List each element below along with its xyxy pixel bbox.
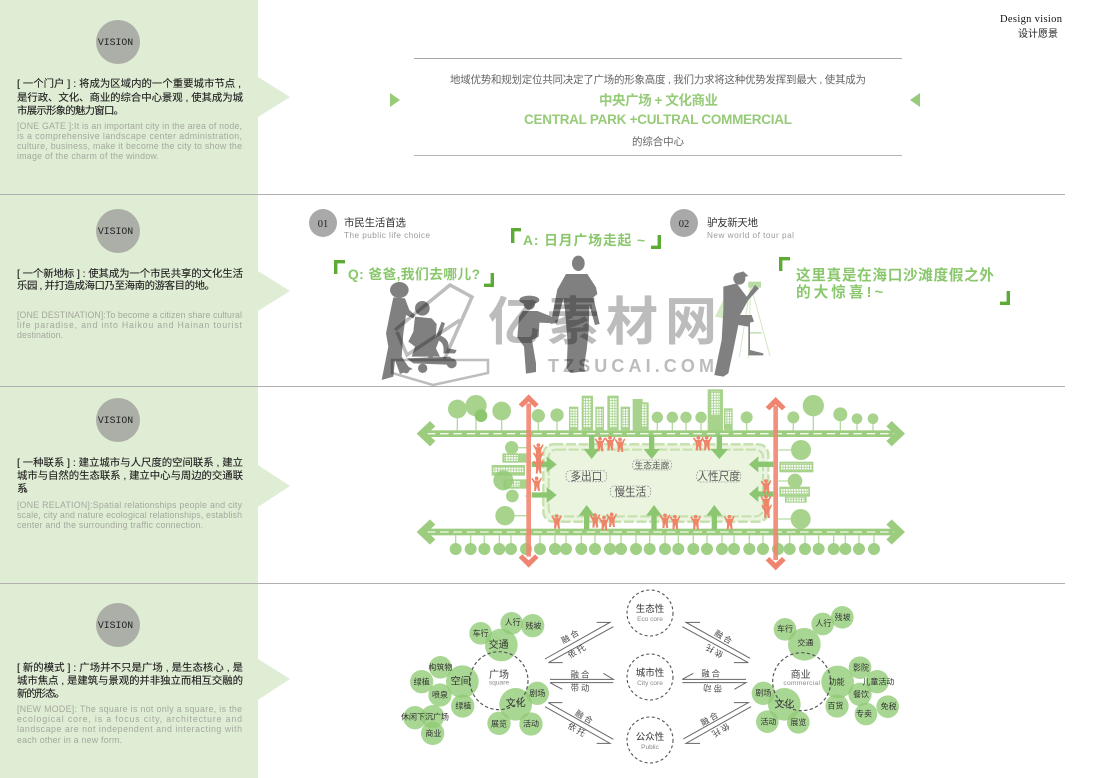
- bubble labels: 展览: [491, 719, 507, 729]
- bubble labels: 残坡: [835, 612, 851, 622]
- Chinese description: 市展示形象的魅力窗口。: [17, 104, 124, 117]
- bubble labels: 车行: [777, 624, 793, 634]
- bubble labels: 文化: [506, 697, 526, 710]
- left arrow marker: [390, 93, 400, 107]
- bubble labels: 商业: [425, 728, 441, 738]
- highlighted English heading: CENTRAL PARK +CULTRAL COMMERCIAL: [524, 112, 792, 127]
- bubble labels: 休闲下沉广场: [401, 711, 449, 721]
- arrows: commercial to cores: [682, 622, 751, 743]
- Chinese description: [ 一个新地标 ] : 使其成为一个市民共享的文化生活: [17, 267, 243, 280]
- bubble labels: 人行: [505, 617, 521, 627]
- Chinese description: [17, 456, 244, 495]
- bubble labels: [755, 612, 897, 727]
- question callout: Q: 爸爸,我们去哪儿?: [348, 266, 480, 282]
- Chinese description: 新的形态。: [17, 687, 65, 700]
- eco core: [627, 590, 673, 636]
- bubble labels: 人行: [815, 618, 831, 628]
- vision badge: VISION: [98, 415, 133, 426]
- chart: urban relation plan: [417, 389, 905, 570]
- Chinese description: [17, 661, 243, 700]
- arrows: commercial to cores: 融合: [701, 669, 722, 679]
- city core: City core: [637, 680, 663, 687]
- vision badge: [96, 398, 140, 442]
- public core: [627, 717, 673, 763]
- arrows: commercial to cores: 依托: [708, 721, 731, 740]
- bubble labels: 展览: [790, 717, 806, 727]
- bubble labels: commercial: [783, 680, 821, 687]
- green access arrows: [532, 435, 773, 530]
- English description: is a comprehensive landscape center administration,: [17, 131, 242, 141]
- red pedestrian figures: [531, 436, 772, 530]
- highlighted Chinese heading: 中央广场 + 文化商业: [599, 92, 718, 108]
- bubble labels: 专卖: [856, 709, 872, 719]
- English description: image of the charm of the window.: [17, 151, 159, 161]
- panel: citizen and tourist scenes: [309, 209, 1008, 385]
- bubble labels: 功能: [829, 677, 845, 687]
- bubble labels: 空间: [451, 675, 471, 688]
- page title: 设计愿景: [1018, 27, 1058, 40]
- panel: new mode text: [17, 603, 290, 745]
- watermark: [392, 285, 717, 385]
- tourist callout: 的大惊喜!~: [796, 283, 883, 301]
- diagram: core circles: [627, 590, 673, 763]
- vision badge: VISION: [98, 620, 133, 631]
- plaza labels: 多出口: [570, 470, 602, 483]
- public core: 公众性: [636, 731, 665, 743]
- dashed hub: [773, 653, 831, 711]
- arrows: square to cores: 依托: [566, 641, 589, 660]
- item 01 heading: 市民生活首选: [344, 216, 406, 229]
- diagram: commercial bubble cluster: [752, 606, 899, 734]
- item 01 heading: 01: [318, 219, 328, 230]
- bubble labels: 活动: [523, 719, 539, 729]
- English description: [ONE GATE ]:It is an important city in the area of node,: [17, 121, 242, 131]
- top tree stems: [457, 406, 873, 430]
- bubble labels: [401, 617, 545, 738]
- bubble labels: 剧场: [755, 689, 771, 698]
- English description: [ONE DESTINATION]:To become a citizen share cultural: [17, 310, 242, 320]
- bubble labels: 交通: [797, 638, 813, 648]
- panel: one destination text: [17, 209, 290, 340]
- bubble labels: 广场: [489, 668, 509, 681]
- arrows: square to cores: 融合: [573, 708, 596, 727]
- English description: culture, business, make it become the city to show the: [17, 141, 242, 151]
- watermark: TZSUCAI.COM: [548, 356, 714, 376]
- bubble labels: 影院: [853, 662, 869, 672]
- bubble labels: 车行: [473, 628, 489, 638]
- item 02 heading: 02: [679, 219, 689, 230]
- English description: center and the surrounding traffic connection.: [17, 520, 203, 530]
- tourist callout: [781, 259, 1008, 303]
- intro sentence: 地域优势和规划定位共同决定了广场的形象高度 , 我们力求将这种优势发挥到最大 , 使其成为: [450, 73, 866, 86]
- arrows: commercial to cores: 带动: [701, 683, 722, 693]
- skyline buildings: [569, 389, 733, 431]
- arrows: commercial to cores: 融合: [713, 628, 736, 647]
- English description: life paradise, and into Haikou and Hainan tourist: [17, 320, 243, 330]
- answer callout: [513, 230, 659, 248]
- arrows: square to cores: 依托: [566, 721, 589, 740]
- English description: scale, city and nature ecological relationships, establish: [17, 510, 242, 520]
- eco core: 生态性: [636, 603, 665, 615]
- public core: Public: [641, 744, 660, 751]
- top road with arrows: [417, 421, 905, 446]
- bubble labels: 商业: [791, 668, 811, 681]
- Chinese description: 城市与自然的生态联系 , 建立中心与周边的交通联: [17, 469, 244, 482]
- page title: Design vision: [1000, 14, 1063, 25]
- arrows: square to cores: 融合: [571, 670, 591, 680]
- vision badge: [96, 20, 140, 64]
- Chinese description: 乐园 , 并打造成海口乃至海南的游客目的地。: [17, 279, 215, 292]
- question callout: [336, 262, 492, 285]
- pointer triangle: [258, 659, 290, 700]
- watermark: 亿素材网: [488, 294, 717, 352]
- arrows: square to cores: [545, 622, 613, 743]
- bubble labels: 交通: [489, 638, 509, 651]
- bubble labels: 喷泉: [432, 690, 448, 700]
- closing line: 的综合中心: [632, 135, 684, 148]
- right arrow marker: [910, 93, 920, 107]
- plaza labels: 人性尺度: [697, 470, 740, 483]
- bubble labels: 绿植: [414, 676, 430, 686]
- pointer triangle: [258, 271, 290, 311]
- diagram: square bubble cluster: [401, 612, 549, 745]
- green bubbles: [403, 612, 549, 745]
- green bubbles: [752, 606, 899, 734]
- pointer triangle: [258, 465, 290, 507]
- bottom tree row: [450, 535, 880, 555]
- English description: [ONE RELATION]:Spatial relationships people and city: [17, 500, 243, 510]
- bubble labels: 免税: [881, 701, 897, 711]
- bubble labels: 文化: [774, 697, 794, 710]
- English description: [17, 121, 242, 161]
- Chinese description: [ 一种联系 ] : 建立城市与人尺度的空间联系 , 建立: [17, 456, 243, 469]
- item 01 heading: [309, 209, 430, 240]
- Chinese description: 系。: [17, 483, 34, 495]
- English description: [17, 704, 242, 745]
- item 02 heading: 驴友新天地: [707, 216, 758, 229]
- plaza labels: 生态走廊: [635, 459, 670, 470]
- top trees: [448, 395, 878, 424]
- tourist callout: 这里真是在海口沙滩度假之外: [796, 266, 994, 284]
- panel: one gate text: [17, 20, 290, 161]
- eco core: Eco core: [637, 616, 663, 623]
- Chinese description: [17, 77, 244, 117]
- dashed hub: [470, 652, 528, 710]
- Chinese description: [ 新的模式 ] : 广场并不只是广场 , 是生态核心 , 是: [17, 661, 243, 674]
- item 01 heading: The public life choice: [344, 231, 430, 240]
- Chinese description: 是行政、文化、商业的综合中心景观 , 使其成为城: [17, 91, 244, 104]
- English description: ecological core, is a focus city, architecture and: [17, 714, 242, 724]
- silhouette: father and child: [517, 256, 600, 374]
- silhouette: mother and stroller: [382, 282, 457, 380]
- left green sidebar: [0, 0, 258, 778]
- item 02 heading: New world of tour pal: [707, 231, 794, 240]
- panel: central statement: [390, 58, 920, 156]
- bubble labels: 百货: [827, 701, 843, 711]
- English description: each other in a new form.: [17, 735, 122, 745]
- city core: [627, 654, 673, 700]
- central plaza: [543, 444, 768, 522]
- side trees and buildings: [492, 440, 813, 529]
- bubble labels: 餐饮: [853, 689, 869, 699]
- English description: [NEW MODE]: The square is not only a square, is the: [17, 704, 242, 714]
- pointer triangle: [258, 77, 290, 117]
- English description: [17, 310, 243, 340]
- bottom road with arrows: [417, 519, 905, 545]
- panel: one relation text: [17, 398, 290, 530]
- Chinese description: [ 一个门户 ] : 将成为区域内的一个重要城市节点 ,: [17, 77, 241, 90]
- English description: destination.: [17, 330, 63, 340]
- bubble labels: 构筑物: [428, 662, 452, 672]
- English description: landscape are not independent and interacting with: [17, 724, 242, 734]
- answer callout: A: 日月广场走起 ~: [523, 232, 645, 248]
- item 02 heading: [670, 209, 794, 240]
- silhouette: photographer with tripod: [714, 271, 770, 377]
- bubble labels: 绿植: [455, 701, 471, 711]
- vision badge: VISION: [98, 37, 133, 48]
- page title: [1000, 14, 1063, 40]
- bubble labels: 残坡: [525, 620, 541, 630]
- bubble labels: 活动: [760, 716, 776, 726]
- arrows: commercial to cores: 融合: [699, 709, 722, 728]
- bubble labels: 剧场: [529, 689, 545, 698]
- bubble labels: 儿童活动: [862, 676, 894, 686]
- vision badge: [96, 603, 140, 647]
- plaza labels: [566, 459, 741, 498]
- arrows: commercial to cores: 依托: [702, 641, 725, 660]
- Chinese description: 城市焦点 , 是建筑与景观的并非独立而相互交融的: [17, 674, 243, 687]
- Chinese description: [17, 267, 243, 292]
- vision badge: VISION: [98, 226, 133, 237]
- arrows: square to cores: 融合: [559, 627, 582, 646]
- vision badge: [96, 209, 140, 253]
- plaza labels: 慢生活: [614, 485, 647, 498]
- city core: 城市性: [636, 667, 665, 679]
- bubble labels: square: [489, 680, 509, 687]
- north-south arrows: [519, 394, 786, 570]
- arrows: square to cores: 带动: [571, 683, 591, 693]
- English description: [17, 500, 243, 530]
